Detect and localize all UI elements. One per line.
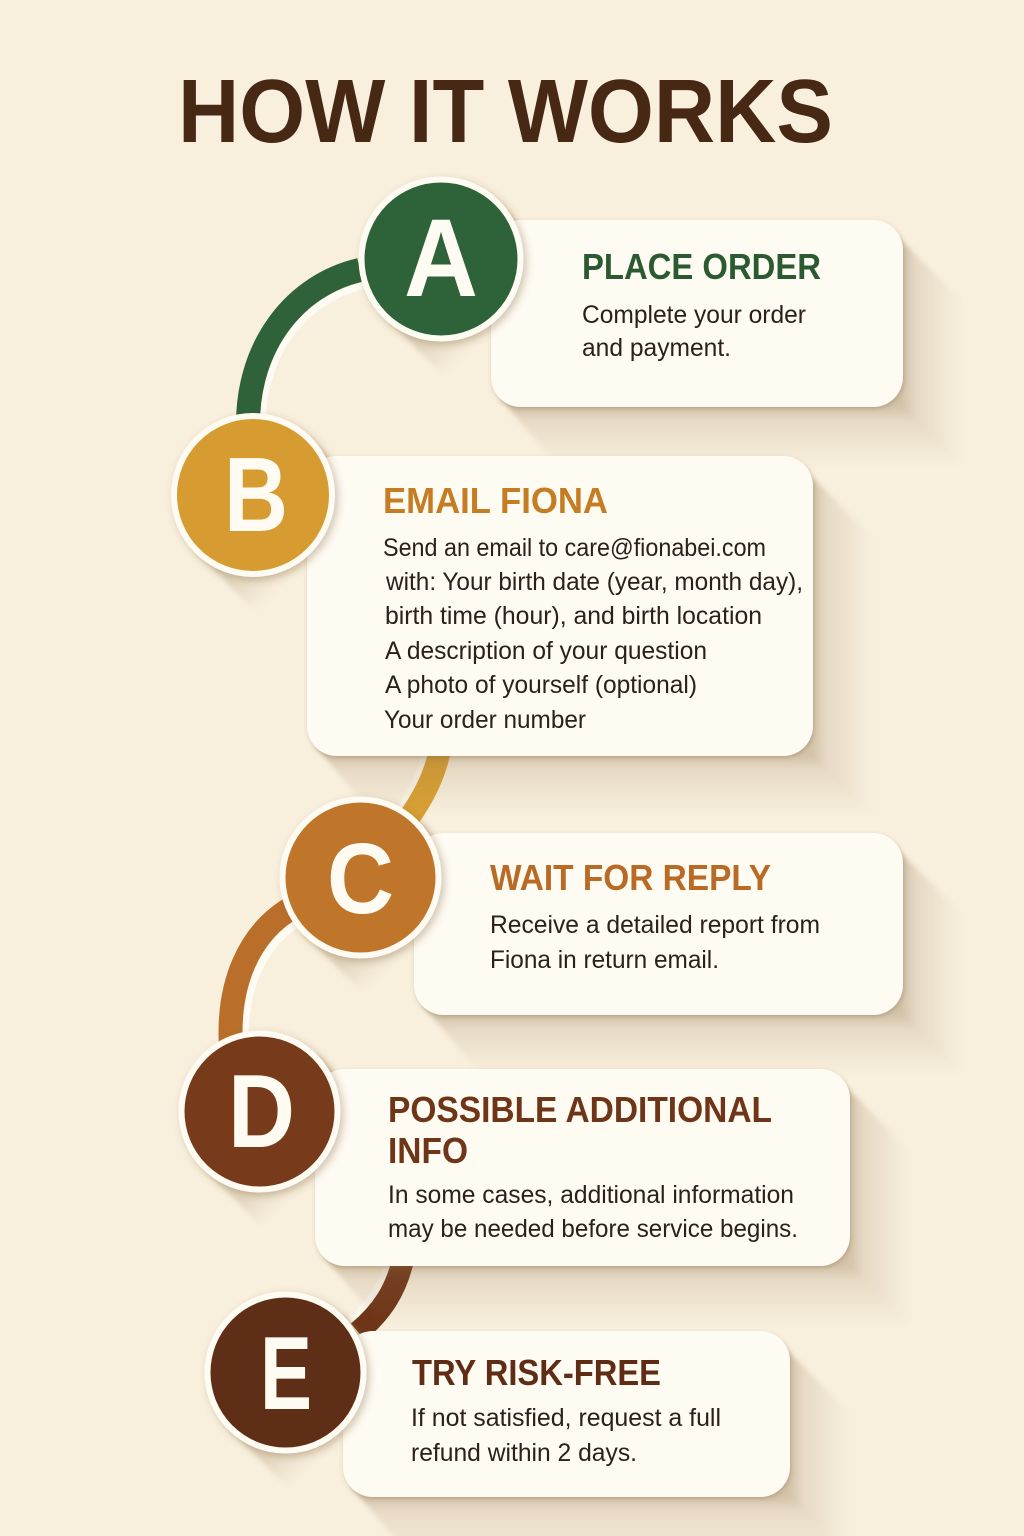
text: email fiona body: A photo of yourself (optional) — [385, 671, 697, 699]
badge: C — [282, 800, 438, 956]
card: try risk-free — [343, 1331, 790, 1497]
connector arc: C to D — [231, 906, 297, 1048]
text: email fiona body: Send an email to care@fionabei.com — [383, 534, 766, 562]
heading: possible additional info: INFO — [388, 1130, 468, 1171]
heading: place order: PLACE ORDER — [582, 246, 821, 287]
card: possible additional info — [315, 1069, 850, 1266]
text: email fiona body: birth time (hour), and birth location — [385, 602, 762, 630]
badge: A — [362, 180, 520, 338]
badge: E: E — [260, 1316, 312, 1432]
panel: try risk-free — [343, 1331, 790, 1497]
text: place order body: and payment. — [582, 334, 731, 362]
panel: email fiona — [307, 456, 813, 756]
card: wait for reply — [414, 833, 903, 1015]
card: email fiona — [307, 456, 813, 756]
badge: C: C — [327, 823, 394, 935]
connector arc: A to B — [248, 270, 360, 424]
heading: possible additional info — [388, 1089, 772, 1171]
text: email fiona body: A description of your question — [385, 637, 707, 665]
heading: try risk-free: TRY RISK-FREE — [412, 1352, 661, 1393]
panel: wait for reply — [414, 833, 903, 1015]
heading: email fiona: EMAIL FIONA — [383, 480, 608, 521]
badge: D — [182, 1034, 338, 1190]
panel: place order — [491, 220, 903, 407]
title: HOW IT WORKS — [178, 62, 833, 162]
long shadows of badges — [196, 202, 558, 1489]
text: wait for reply body — [490, 911, 820, 974]
text: wait for reply body: Fiona in return email. — [490, 946, 719, 974]
text: email fiona body: Your order number — [384, 706, 586, 734]
text: wait for reply body: Receive a detailed report from — [490, 911, 820, 939]
badge: D: D — [228, 1054, 295, 1170]
badge: B: B — [224, 436, 288, 554]
card: place order — [491, 220, 903, 407]
badge: B — [174, 416, 332, 574]
text: possible additional info body: In some cases, additional information — [388, 1181, 794, 1209]
text: try risk-free body — [411, 1404, 721, 1467]
text: try risk-free body: If not satisfied, request a full — [411, 1404, 721, 1432]
text: possible additional info body — [388, 1181, 798, 1243]
text: try risk-free body: refund within 2 days. — [411, 1439, 637, 1467]
connector arc: B to C — [400, 750, 440, 822]
text: place order body — [582, 301, 806, 362]
badge: A: A — [404, 197, 478, 320]
text: place order body: Complete your order — [582, 301, 806, 329]
text: possible additional info body: may be needed before service begins. — [388, 1215, 798, 1243]
connector arc: D to E — [350, 1260, 403, 1332]
heading: wait for reply: WAIT FOR REPLY — [490, 857, 771, 898]
panel: possible additional info — [315, 1069, 850, 1266]
text: email fiona body: with: Your birth date (year, month day), — [385, 568, 803, 596]
text: email fiona body — [383, 534, 803, 734]
long shadows of cards — [315, 232, 963, 1536]
badge: E — [208, 1294, 364, 1450]
heading: possible additional info: POSSIBLE ADDITIONAL — [388, 1089, 772, 1130]
